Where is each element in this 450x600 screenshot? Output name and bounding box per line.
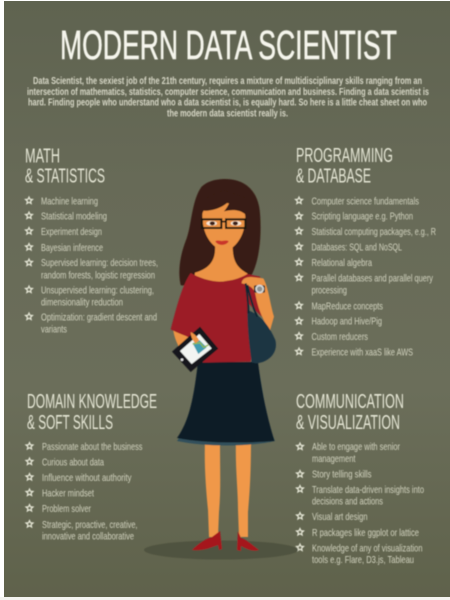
tablet — [172, 327, 218, 372]
heading: communication and visualization — [296, 391, 404, 434]
heading: domain knowledge and soft skills: & SOFT SKILLS — [27, 412, 113, 434]
panel: domain knowledge and soft skills — [26, 391, 157, 542]
red top — [171, 273, 273, 363]
list: math skills: random forests, logistic regression — [41, 270, 155, 282]
list: communication skills — [297, 441, 424, 566]
fringe — [202, 190, 247, 215]
left hand — [173, 331, 193, 370]
skirt — [177, 362, 275, 446]
list: math skills: Bayesian inference — [41, 242, 103, 254]
list: communication skills: Able to engage with senior — [312, 441, 400, 453]
list: communication skills: tools e.g. Flare, D3.js, Tableau — [312, 554, 414, 566]
ground shadow — [144, 540, 298, 560]
list: programming skills: MapReduce concepts — [312, 300, 383, 312]
list: domain and soft skills: Hacker mindset — [42, 488, 94, 500]
heading: math and statistics: MATH — [25, 146, 60, 168]
list: programming skills: Hadoop and Hive/Pig — [312, 316, 382, 328]
heading: domain knowledge and soft skills — [27, 391, 157, 434]
heading: programming and database — [296, 145, 393, 188]
bottom edge — [0, 597, 450, 600]
heading: programming and database: PROGRAMMING — [296, 145, 393, 167]
wristwatch — [254, 285, 265, 293]
list: domain and soft skills: Problem solver — [42, 503, 91, 515]
list: programming skills: Databases: SQL and NoSQL — [312, 242, 402, 254]
list: math skills: Machine learning — [41, 196, 98, 208]
intro text block: the modern data scientist really is. — [167, 108, 288, 120]
panel: communication and visualization — [296, 391, 424, 566]
list: communication skills: management — [312, 453, 356, 465]
list: math skills: Optimization: gradient descent and — [41, 312, 157, 324]
list: math skills: Supervised learning: decision trees, — [41, 257, 158, 269]
figure: data scientist woman — [144, 179, 298, 560]
list: domain and soft skills: Passionate about the business — [42, 441, 142, 453]
list: programming skills: Relational algebra — [312, 257, 372, 269]
list: math skills — [26, 196, 158, 336]
list: math skills: Unsupervised learning: clustering, — [41, 284, 154, 296]
panel: math and statistics — [25, 146, 158, 336]
right arm — [242, 277, 274, 331]
list: math skills: Statistical modeling — [41, 210, 107, 222]
list: domain and soft skills: Influence without authority — [42, 472, 132, 484]
face — [202, 203, 245, 252]
neck and chest — [193, 245, 250, 285]
lips — [215, 240, 229, 245]
list: programming skills — [296, 196, 436, 358]
list: domain and soft skills — [26, 441, 143, 542]
list: domain and soft skills: innovative and collaborative — [42, 530, 134, 542]
handbag — [246, 283, 276, 363]
list: math skills: Experiment design — [41, 226, 102, 238]
list: programming skills: processing — [312, 284, 347, 296]
red shoes — [192, 531, 259, 551]
heading: domain knowledge and soft skills: DOMAIN KNOWLEDGE — [27, 391, 157, 413]
list: communication skills: Story telling skills — [312, 468, 372, 480]
heading: programming and database: & DATABASE — [296, 166, 371, 188]
list: domain and soft skills: Curious about data — [42, 456, 104, 468]
hair — [179, 179, 261, 285]
legs — [205, 440, 251, 537]
list: communication skills: Visual art design — [312, 511, 368, 523]
heading: math and statistics — [25, 146, 105, 188]
thumb over tablet — [191, 332, 199, 343]
list: communication skills: decisions and actions — [312, 496, 383, 508]
heading: math and statistics: & STATISTICS — [25, 166, 105, 188]
list: domain and soft skills: Strategic, proactive, creative, — [42, 519, 138, 531]
panel: programming and database — [296, 145, 436, 358]
glasses and eyes — [202, 219, 245, 228]
list: math skills: dimensionality reduction — [41, 296, 123, 308]
list: programming skills: Custom reducers — [312, 331, 368, 343]
list: math skills: variants — [41, 324, 67, 336]
intro text block — [27, 76, 429, 120]
